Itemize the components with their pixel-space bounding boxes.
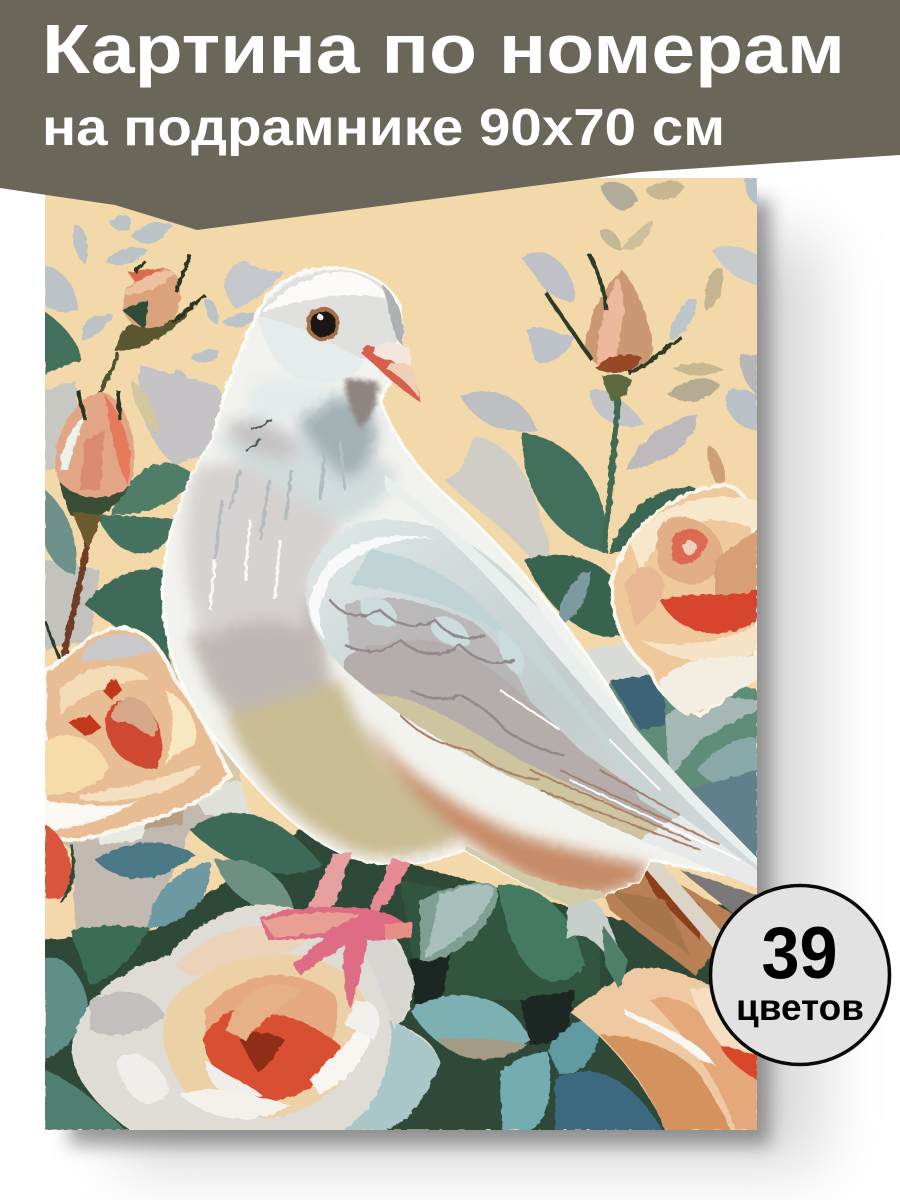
badge: 39 colours xyxy=(710,886,890,1064)
rose buds xyxy=(56,255,682,550)
dove soft body shading xyxy=(185,377,648,895)
chest shading xyxy=(184,592,336,718)
dove tail xyxy=(605,874,732,976)
belly shading xyxy=(225,680,470,856)
rose: bottom right xyxy=(570,968,757,1130)
right bud xyxy=(585,270,652,371)
low right leaves xyxy=(420,883,498,960)
dove body xyxy=(163,268,757,900)
background pale leaves xyxy=(45,178,757,790)
grey area under left rose xyxy=(62,803,218,930)
rose: bottom center xyxy=(72,904,440,1130)
low left leaves xyxy=(95,842,195,879)
subtitle: на подрамнике 90x70 см xyxy=(42,99,725,157)
green leaves xyxy=(45,312,695,1130)
title: Картина по номерам xyxy=(42,10,845,88)
lower dark foliage base xyxy=(45,830,757,1130)
dove xyxy=(163,268,757,1008)
dove eye xyxy=(306,307,340,341)
stems xyxy=(45,355,618,660)
dove beak xyxy=(360,345,421,403)
right-side foliage behind rose xyxy=(608,682,757,790)
painting: dove and roses xyxy=(35,170,770,1140)
dove neck streaks xyxy=(210,420,345,610)
header banner xyxy=(0,0,900,230)
lower left bud xyxy=(56,392,134,501)
rose: left xyxy=(45,628,230,902)
rose: top right xyxy=(612,485,757,715)
dove wing xyxy=(306,520,757,885)
grey petals behind tail xyxy=(566,900,618,952)
dove feet xyxy=(260,852,412,1008)
canvas shadow xyxy=(70,200,820,1165)
dove head xyxy=(258,270,404,360)
badge: 39 colours: 39 xyxy=(762,913,838,994)
badge: 39 colours: цветов xyxy=(736,987,864,1028)
upper left bud xyxy=(122,268,181,331)
